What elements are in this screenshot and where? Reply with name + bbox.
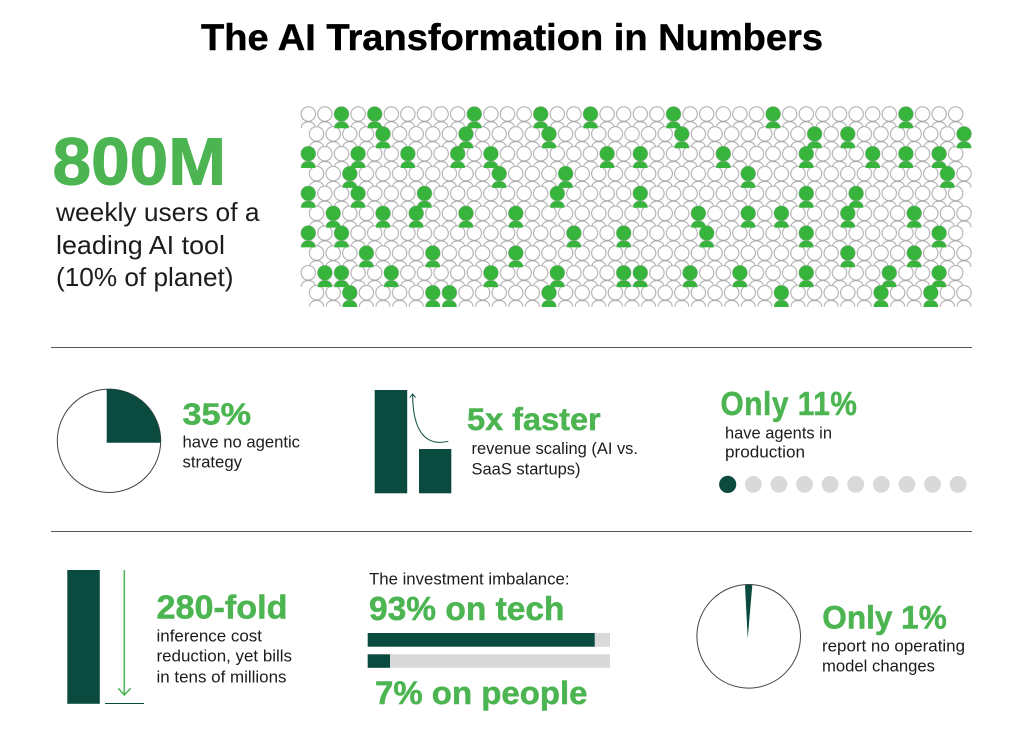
description: weekly users [55, 197, 260, 292]
description: agents in production: production [725, 443, 805, 462]
description: operating model [822, 637, 965, 676]
description: weekly users: leading AI tool [56, 230, 225, 260]
headline: 800M: 800M [52, 124, 226, 200]
description: inference cost [156, 627, 292, 686]
description: inference cost: inference cost [156, 627, 262, 646]
pie chart: 1% [697, 584, 800, 688]
panel: 800M weekly users [52, 124, 260, 292]
description: inference cost: in tens of millions [156, 667, 286, 686]
description: no agentic strategy [182, 433, 300, 472]
panel: investment imbalance [368, 569, 610, 711]
headline: Only 1%: Only 1% [822, 599, 947, 635]
description: revenue scaling: SaaS startups) [472, 459, 580, 478]
panel: 280-fold cost reduction [67, 570, 292, 704]
description: agents in production [725, 423, 832, 462]
arrow: downward [118, 570, 131, 695]
bar chart: AI vs SaaS growth [375, 390, 451, 493]
headline: 93% on tech: 93% on tech [369, 590, 564, 627]
headline: 7% on people: 7% on people [375, 675, 588, 711]
description: operating model: report no operating [822, 637, 965, 656]
headline: Only 11%: Only 11% [720, 385, 858, 422]
bar: 7% people [368, 654, 610, 668]
headline: 5x faster: 5x faster [467, 401, 601, 437]
bar: 93% tech [368, 633, 610, 647]
description: weekly users: (10% of planet) [56, 262, 234, 292]
description: revenue scaling: revenue scaling (AI vs. [472, 439, 638, 458]
panel: 5x faster revenue scaling [375, 390, 638, 493]
description: no agentic strategy: have no agentic [182, 433, 300, 452]
bar: inference cost [67, 570, 100, 704]
headline: 35%: 35% [182, 398, 251, 432]
description: inference cost: reduction, yet bills [156, 647, 292, 666]
panel: only 1% operating model [697, 584, 965, 688]
chart: people pictogram grid [300, 106, 972, 308]
headline: 280-fold: 280-fold [156, 588, 288, 625]
description: agents in production: have agents in [725, 423, 832, 442]
description: no agentic strategy: strategy [182, 453, 243, 472]
description: operating model: model changes [822, 657, 935, 676]
panel: only 11% agents in production [719, 385, 966, 493]
title: The AI Transformation in Numbers [201, 17, 823, 58]
panel: 35% no agentic strategy [57, 389, 300, 492]
baseline: reduced bar [105, 702, 144, 704]
description: weekly users: weekly users of a [55, 197, 260, 227]
description: revenue scaling [472, 439, 638, 478]
dot scale: 1 of 10 [719, 476, 966, 493]
arrow: curved upward [410, 394, 448, 442]
heading: investment imbalance: The investment imbalance: [369, 569, 570, 588]
pie chart: 35% [57, 389, 161, 492]
